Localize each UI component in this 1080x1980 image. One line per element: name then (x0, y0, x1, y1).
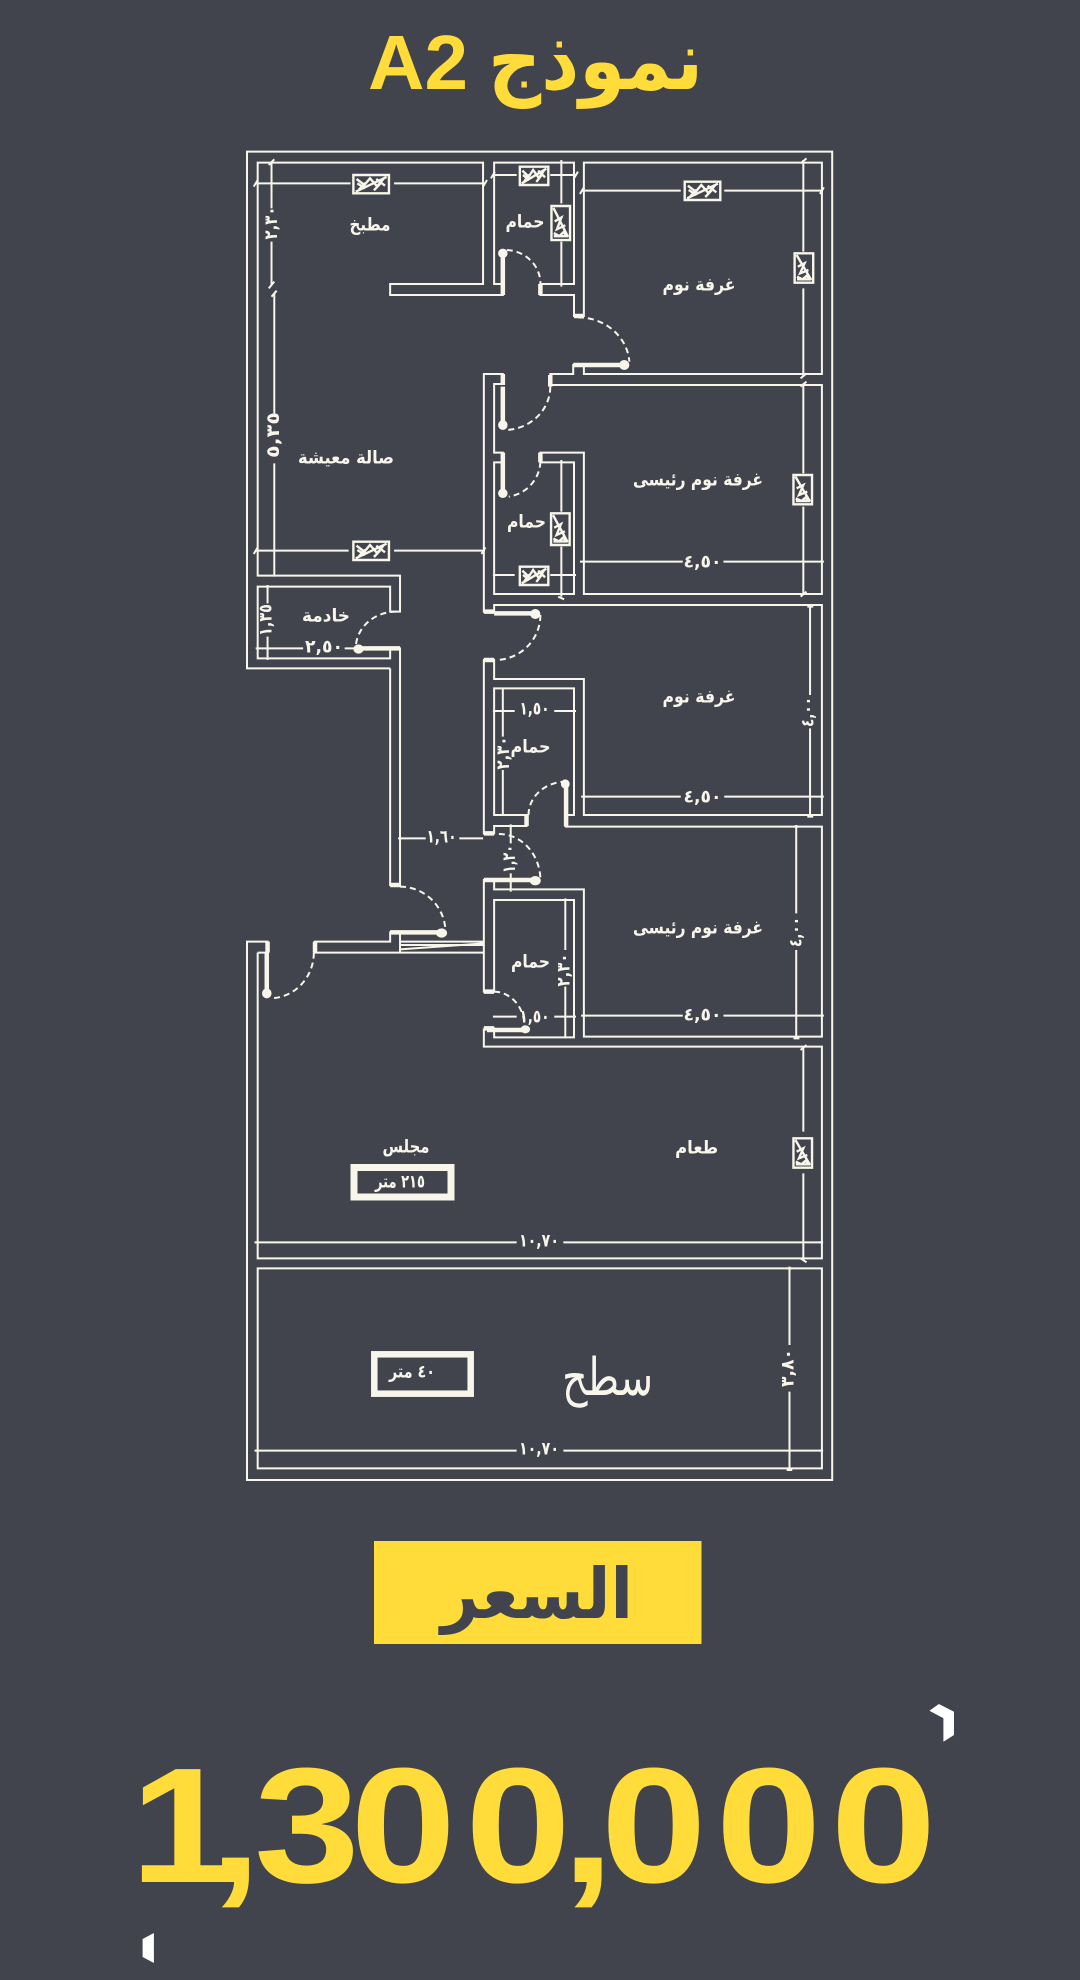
room labels (298, 212, 763, 1158)
price label (374, 1541, 702, 1644)
plan walls, doors and dimensions (247, 152, 832, 1480)
room labels: مجلس (382, 1136, 430, 1158)
room labels: طعام (675, 1138, 718, 1158)
area box: 215 m: ٢١٥ متر (374, 1172, 425, 1192)
door hinges (262, 249, 629, 1033)
room labels: مطبخ (350, 214, 390, 236)
dimension labels: ٥,٣٥ (263, 412, 284, 458)
dimension labels: ٢,٥٠ (305, 636, 343, 658)
door swing arcs (272, 250, 629, 1027)
title: نموذج (488, 14, 703, 109)
window tags (353, 167, 813, 1168)
dimension labels: ١,٥٠ (520, 1006, 550, 1028)
title (368, 14, 703, 109)
room labels: خادمة (302, 606, 350, 626)
dimension lines (256, 160, 822, 1470)
dimension labels: ٤,٠٠ (798, 697, 818, 727)
dimension labels: ٢,٣٠ (554, 954, 574, 986)
room labels: حمام (511, 952, 550, 972)
dimension labels: ٣,٨٠ (778, 1349, 798, 1387)
walls (247, 152, 832, 1480)
decorative mark top (929, 1704, 954, 1742)
dimension end ticks (254, 158, 824, 1470)
price label: السعر (438, 1553, 633, 1635)
dimension labels: ١,٦٠ (426, 826, 456, 848)
dimension labels: ١٠,٧٠ (519, 1230, 559, 1252)
room labels: غرفة نوم (662, 274, 736, 296)
dimension labels: ٤,٠٠ (786, 917, 806, 947)
dimension labels (256, 206, 818, 1460)
room labels: غرفة نوم (662, 686, 736, 708)
dimension labels: ٤,٥٠ (684, 1004, 722, 1026)
dimension labels: ١٠,٧٠ (519, 1438, 559, 1460)
floor plan (247, 152, 832, 1480)
dimension labels: ١,٣٥ (256, 604, 276, 636)
area box: 215 m (354, 1168, 451, 1197)
room labels: حمام (510, 736, 550, 758)
dimension labels: ١,٢٠ (499, 845, 520, 873)
dimension labels: ٢,٣٠ (261, 206, 282, 240)
decorative mark bottom (143, 1933, 154, 1963)
dimension labels: ٤,٥٠ (684, 786, 722, 808)
price value: 1,300,000 (130, 1733, 936, 1917)
room labels: غرفة نوم رئيسى (633, 918, 763, 938)
door leaves (267, 253, 623, 1030)
area box: 40 m: ٤٠ متر (388, 1362, 435, 1382)
title: A2 (368, 20, 468, 106)
dimension labels: ٢,٣٠ (493, 736, 514, 770)
room labels: صالة معيشة (298, 448, 394, 468)
room labels: حمام (506, 212, 544, 232)
room labels: حمام (507, 512, 546, 532)
room labels: غرفة نوم رئيسى (633, 470, 763, 490)
roof label: سطح (562, 1348, 653, 1408)
area box: 40 m (374, 1354, 471, 1394)
dimension labels: ١,٥٠ (520, 698, 550, 720)
dimension labels: ٤,٥٠ (684, 552, 722, 572)
